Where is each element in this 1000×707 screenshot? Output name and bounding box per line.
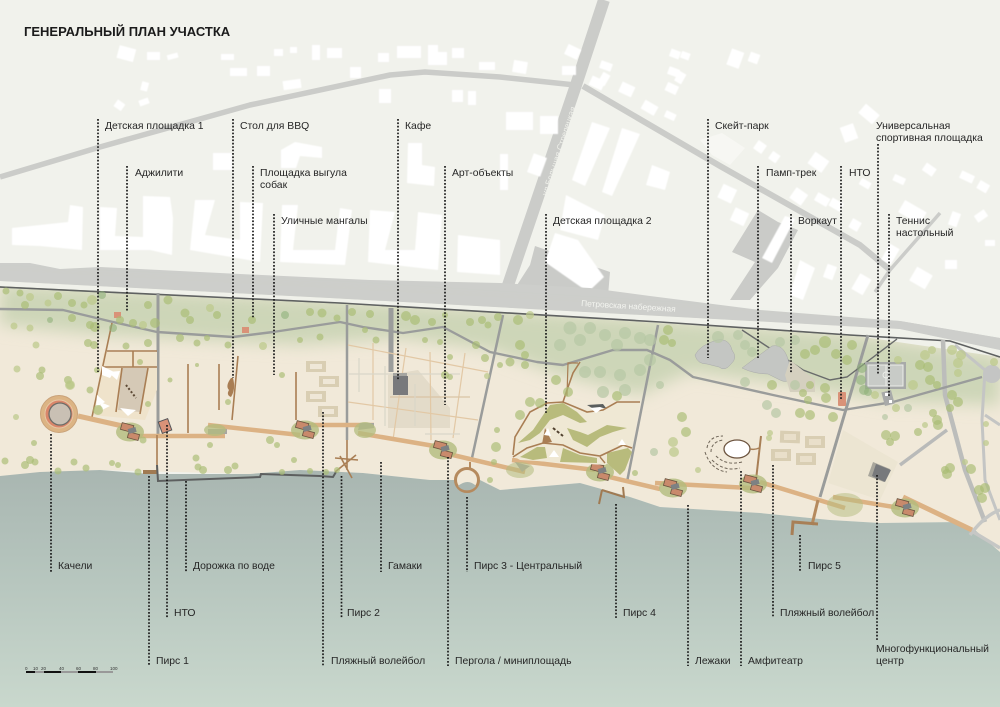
universal sports ground	[865, 362, 906, 406]
labels: upper: Скейт-парк	[715, 121, 769, 132]
scale bar: 20	[41, 666, 47, 671]
icon: cafe building	[393, 373, 408, 395]
beach volleyball courts	[306, 361, 825, 465]
labels: lower: Дорожка по воде	[193, 561, 275, 572]
scale bar: 100	[110, 666, 118, 671]
labels: lower: Пирс 1	[156, 656, 189, 667]
map: white strip and rail restored above lawn	[0, 262, 1000, 357]
labels: upper: настольный	[896, 228, 954, 239]
street labels: ул.Большая Стрелецкая	[540, 106, 578, 197]
labels: upper: Кафе	[405, 120, 431, 132]
labels: upper: спортивная площадка	[876, 133, 983, 144]
map: city roads	[0, 0, 940, 300]
playground 2	[513, 362, 640, 475]
swings ring	[40, 396, 78, 432]
playground 1	[92, 323, 157, 420]
labels: lower: Амфитеатр	[748, 655, 803, 667]
labels: lower: Пляжный волейбол	[780, 607, 874, 619]
labels: upper: Площадка выгула	[260, 168, 347, 179]
labels: upper: Уличные мангалы	[281, 216, 368, 227]
labels: lower: Гамаки	[388, 561, 422, 572]
scale bar: 0	[25, 666, 28, 671]
small red kiosks	[114, 312, 846, 433]
labels: upper: Арт-объекты	[452, 167, 513, 179]
labels: upper: Стол для BBQ	[240, 121, 309, 132]
labels: lower: Пирс 2	[347, 608, 380, 619]
multifunctional centre building	[868, 462, 891, 482]
map: white city buildings	[12, 44, 995, 300]
labels: lower: НТО	[174, 608, 195, 619]
map: dark drive lane	[742, 330, 897, 380]
labels: upper: Воркаут	[798, 216, 837, 227]
labels: upper: собак	[260, 179, 288, 191]
labels: upper: Детская площадка 1	[105, 121, 204, 132]
pavilions	[116, 420, 919, 518]
labels: lower	[58, 561, 989, 667]
labels: upper: Аджилити	[135, 168, 183, 179]
map: faint courtyard outline	[700, 133, 745, 165]
labels: upper: Теннис	[896, 216, 930, 227]
street labels	[540, 106, 676, 314]
labels: lower: Пирс 5	[808, 561, 841, 572]
scale bar: 40	[59, 666, 65, 671]
amphitheatre	[705, 436, 759, 472]
labels: lower: Пирс 4	[623, 608, 656, 619]
labels: lower: Качели	[58, 561, 93, 572]
map: land and beach	[0, 288, 1000, 552]
timber pier connectors	[143, 356, 818, 535]
labels: upper: Универсальная	[876, 121, 950, 132]
map: walking path	[0, 309, 982, 410]
chart: pale square zones	[388, 370, 898, 500]
dotted leader lines bottom	[51, 412, 877, 666]
map: embankment highway	[0, 263, 1000, 357]
scale bar	[25, 666, 118, 673]
labels: lower: центр	[876, 656, 904, 667]
trees	[2, 288, 998, 503]
scale bar: 10	[33, 666, 39, 671]
labels: lower: Лежаки	[695, 656, 731, 667]
scale bar: 80	[93, 666, 99, 671]
title: ГЕНЕРАЛЬНЫЙ ПЛАН УЧАСТКА	[24, 24, 231, 39]
water walkway	[157, 465, 336, 481]
labels: upper: НТО	[849, 168, 870, 179]
street labels: Петровская набережная	[581, 298, 676, 314]
skate park and pump track	[695, 340, 815, 392]
map: green lawn band	[0, 284, 1000, 405]
labels: lower: Пляжный волейбол	[331, 655, 425, 667]
scale bar: 60	[76, 666, 82, 671]
labels: upper	[105, 120, 983, 239]
labels: upper: Детская площадка 2	[553, 216, 652, 227]
labels: lower: Пирс 3 - Центральный	[474, 561, 582, 572]
labels: lower: Многофункциональный	[876, 643, 989, 655]
dotted leader lines top	[98, 119, 889, 413]
labels: lower: Пергола / миниплощадь	[455, 656, 572, 667]
map: lattice paths of art objects	[348, 343, 488, 440]
labels: upper: Памп-трек	[766, 168, 817, 179]
map: water	[0, 470, 1000, 707]
timber promenade	[78, 416, 972, 530]
map: grey service roads	[158, 293, 1000, 548]
